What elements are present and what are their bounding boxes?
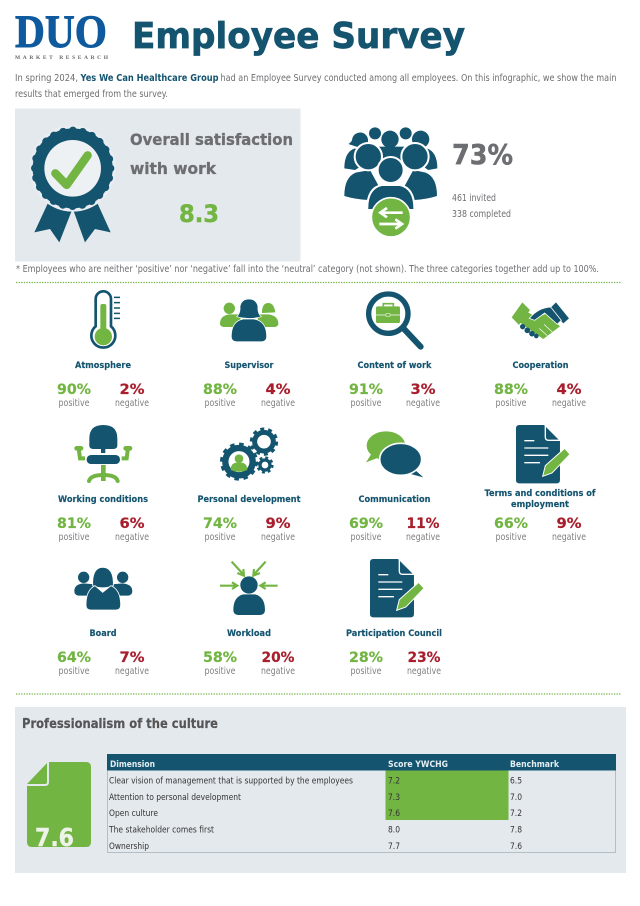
- item: Workload: 20%: [262, 650, 295, 666]
- item: Atmosphere: [57, 291, 149, 409]
- heading: overall satisfaction: with work: [130, 159, 216, 178]
- item: Personal development: 9%: [266, 516, 291, 532]
- item: Board: 64%: [57, 650, 91, 666]
- item: Board: positive: [58, 666, 90, 677]
- response rate: 461 invited: [452, 193, 496, 204]
- table rows: Clear vision of management that is supported by the employees: [109, 776, 353, 786]
- table: dimension scores: [107, 754, 616, 852]
- item: Workload: positive: [204, 666, 236, 677]
- table rows: Ownership: [109, 842, 149, 852]
- intro text: In spring 2024,: [15, 73, 78, 84]
- table rows: 7.0: [510, 793, 522, 803]
- item: Participation Council: negative: [407, 666, 441, 677]
- icon: handshake: [512, 302, 569, 339]
- intro text: Yes We Can Healthcare Group: [80, 73, 219, 84]
- item: Terms and conditions of employment: 9%: [556, 516, 582, 532]
- item: Working conditions: [57, 425, 149, 543]
- item: Board: negative: [115, 666, 149, 677]
- item: Content of work: negative: [406, 398, 440, 409]
- table rows: Open culture: [109, 809, 158, 819]
- item: Communication: 11%: [406, 516, 440, 532]
- item: Content of work: 3%: [410, 382, 436, 398]
- item: Cooperation: Cooperation: [512, 361, 568, 371]
- intro text: [15, 73, 616, 100]
- item: Atmosphere: 2%: [120, 382, 145, 398]
- heading: overall satisfaction: [130, 130, 293, 178]
- table header: Benchmark: [510, 760, 559, 770]
- icon: speech bubbles: [366, 431, 423, 477]
- score 8.3: 8.3: [179, 200, 219, 228]
- label: terms and conditions: [484, 489, 596, 510]
- item: Participation Council: 23%: [408, 650, 441, 666]
- item: Supervisor: [203, 299, 295, 409]
- icon: board members: [74, 567, 132, 610]
- item: Workload: 58%: [203, 650, 237, 666]
- item: Working conditions: positive: [58, 532, 90, 543]
- item: Atmosphere: Atmosphere: [75, 361, 131, 371]
- item: Communication: [349, 431, 440, 543]
- table rows: [108, 776, 522, 852]
- item: Cooperation: 88%: [494, 382, 528, 398]
- item: Communication: Communication: [358, 495, 430, 505]
- item: Terms and conditions of employment: negative: [552, 532, 586, 543]
- item: Personal development: Personal development: [198, 495, 301, 505]
- item: Terms and conditions of employment: [484, 425, 596, 543]
- table rows: 7.3: [388, 793, 400, 803]
- item: Cooperation: negative: [552, 398, 586, 409]
- item: Personal development: 74%: [203, 516, 237, 532]
- icon: magnifier with briefcase: [369, 294, 421, 347]
- item: Participation Council: positive: [350, 666, 382, 677]
- item: Board: [57, 567, 149, 677]
- heading: professionalism: Professionalism of the culture: [22, 716, 218, 732]
- icon: team with supervisor: [220, 299, 278, 342]
- logo: DUO Market Research: MARKET RESEARCH: [15, 55, 109, 61]
- logo: DUO Market Research: DUO: [15, 6, 107, 58]
- item: Workload: negative: [261, 666, 295, 677]
- item: Personal development: negative: [261, 532, 295, 543]
- table rows: 7.2: [510, 809, 522, 819]
- panel: professionalism of the culture: [15, 707, 626, 873]
- item: Personal development: positive: [204, 532, 236, 543]
- table rows: 6.5: [510, 776, 522, 786]
- icon: document with pen: [516, 425, 570, 483]
- table header: [110, 760, 559, 770]
- icon: green document with score: 7.6: [35, 823, 74, 852]
- item: Communication: 69%: [349, 516, 383, 532]
- label: terms and conditions: Terms and conditions of: [484, 489, 596, 499]
- panel: overall satisfaction: [15, 108, 300, 262]
- icon: gears with person: [222, 429, 276, 479]
- item: Supervisor: positive: [204, 398, 236, 409]
- table header: Dimension: [110, 760, 155, 770]
- item: Cooperation: 4%: [556, 382, 582, 398]
- item: Supervisor: 4%: [266, 382, 291, 398]
- item: Atmosphere: positive: [58, 398, 90, 409]
- response rate: 338 completed: [452, 209, 511, 220]
- table rows: Attention to personal development: [109, 793, 241, 803]
- item: Working conditions: 81%: [57, 516, 91, 532]
- item: Atmosphere: negative: [115, 398, 149, 409]
- item: Cooperation: [494, 302, 586, 409]
- item: Cooperation: positive: [496, 398, 527, 409]
- icon: green document with score: [27, 762, 91, 852]
- intro text: results that emerged from the survey.: [15, 89, 168, 100]
- table rows: The stakeholder comes first: [108, 826, 214, 836]
- item: Board: 7%: [120, 650, 145, 666]
- heading: overall satisfaction: Overall satisfaction: [130, 130, 293, 149]
- item: Content of work: positive: [350, 398, 382, 409]
- icon: document with pen: [370, 559, 424, 617]
- item: Supervisor: negative: [261, 398, 295, 409]
- label: terms and conditions: employment: [511, 500, 570, 510]
- table rows: 7.6: [388, 809, 400, 819]
- item: Atmosphere: 90%: [57, 382, 91, 398]
- item: Content of work: Content of work: [358, 361, 432, 371]
- table rows: 7.7: [388, 842, 400, 852]
- item: Participation Council: Participation Council: [346, 629, 442, 639]
- table rows: 7.6: [510, 842, 522, 852]
- item: Working conditions: negative: [115, 532, 149, 543]
- item: Supervisor: 88%: [203, 382, 237, 398]
- item: Supervisor: Supervisor: [224, 361, 274, 371]
- item: Terms and conditions of employment: positive: [496, 532, 527, 543]
- table rows: 8.0: [388, 826, 400, 836]
- item: Communication: negative: [406, 532, 440, 543]
- item: Personal development: [198, 429, 301, 543]
- table rows: 7.2: [388, 776, 400, 786]
- item: Working conditions: Working conditions: [58, 495, 148, 505]
- icon: rosette badge with check: [29, 125, 116, 242]
- response rate: [452, 138, 513, 220]
- icon: thermometer: [91, 291, 120, 348]
- icon: crowd with exchange arrows: [344, 127, 437, 237]
- item: Content of work: [349, 294, 440, 409]
- item: Terms and conditions of employment: 66%: [494, 516, 528, 532]
- item: Communication: positive: [350, 532, 382, 543]
- item: Participation Council: 28%: [349, 650, 383, 666]
- title: Employee Survey: [132, 16, 465, 57]
- item: Workload: Workload: [227, 629, 271, 639]
- response rate: 73%: [452, 138, 513, 171]
- item: Workload: [203, 562, 295, 677]
- item: Participation Council: [346, 559, 442, 677]
- item: Working conditions: 6%: [120, 516, 145, 532]
- table rows: 7.8: [510, 826, 522, 836]
- icon: person under pressure: [220, 562, 278, 615]
- item: Content of work: 91%: [349, 382, 383, 398]
- icon: office chair: [77, 425, 130, 481]
- table header: Score YWCHG: [388, 760, 448, 770]
- item: Board: Board: [90, 629, 116, 639]
